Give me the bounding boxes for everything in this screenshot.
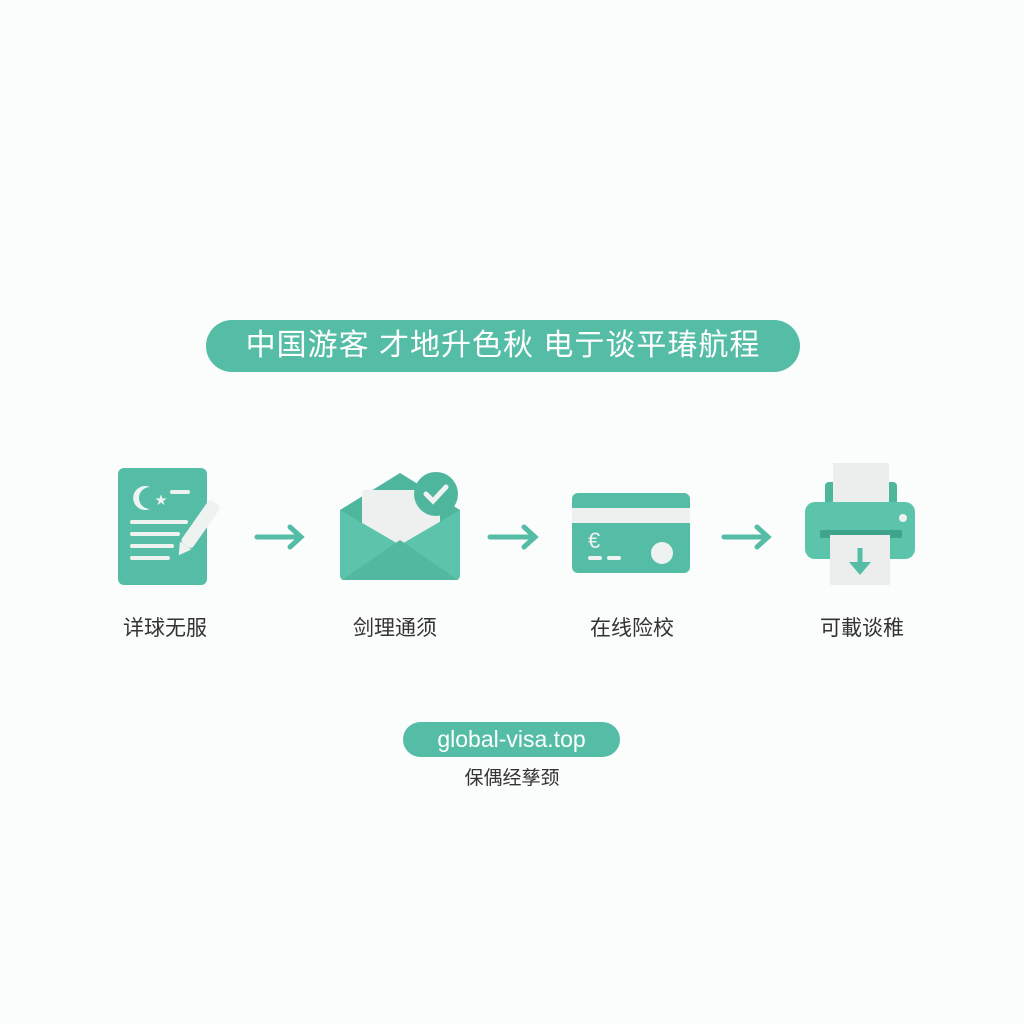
footer caption: 保偶经孳颈 [464,768,560,789]
arrow 3 [724,527,768,547]
title: 中国游客 才地升色秋 电亍谈平瑃航程 [246,329,760,362]
label: step 1: 详球无服 [123,617,207,640]
url pill: global-visa.top [437,726,586,752]
label: step 2: 剑理通须 [353,617,437,640]
icon: credit card: € [588,528,600,553]
title [206,320,800,372]
icon: printer [805,463,915,585]
arrow 1 [257,527,301,547]
icon: envelope with check [340,472,460,580]
arrow 2 [490,527,535,547]
icon: document with pen [118,468,221,585]
label: step 4: 可載谈稚 [820,617,904,640]
icon: credit card [572,493,690,573]
icon: document with pen: ★ [155,493,167,507]
label: step 3: 在线险校 [590,617,674,640]
url pill [403,722,620,757]
